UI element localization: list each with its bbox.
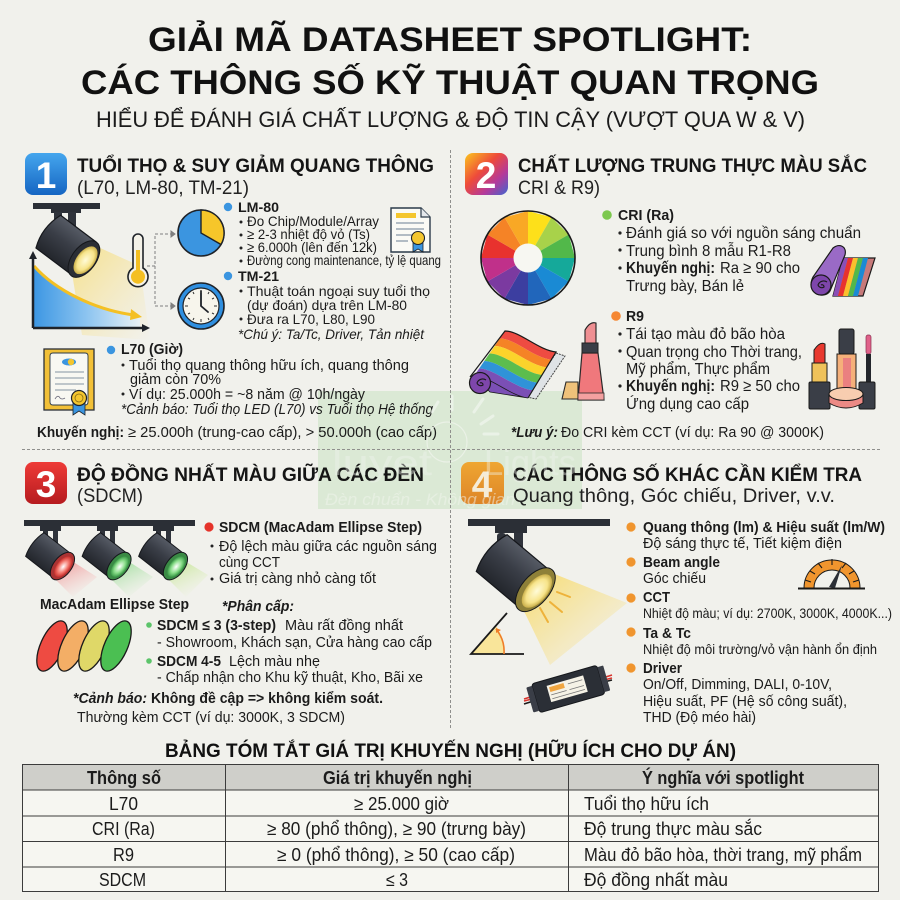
text: LM-80: ≥ 6.000h (lên đến 12k)	[247, 239, 377, 255]
text: CCT	[626, 589, 892, 621]
text: R9: Mỹ phẩm, Thực phẩm	[626, 360, 770, 378]
text: R9: R9	[626, 308, 644, 325]
text: recommendation 1: ≥ 25.000h (trung-cao cấp), > 50.000h (cao cấp)	[128, 424, 437, 441]
badge 3: 3	[36, 464, 56, 505]
heading 2	[518, 155, 867, 199]
text: SDCM warning: Thường kèm CCT (ví dụ: 3000K, 3 SDCM)	[77, 709, 345, 726]
text: LM-80: ≥ 2-3 nhiệt độ vỏ (Ts)	[247, 226, 370, 242]
table row CRI: ≥ 80 (phổ thông), ≥ 90 (trưng bày)	[267, 819, 526, 839]
table row L70	[109, 794, 709, 814]
table row CRI	[92, 818, 762, 839]
table row CRI: CRI (Ra)	[92, 819, 155, 839]
text: CCT: CCT	[643, 589, 670, 606]
table row SDCM: ≤ 3	[386, 870, 408, 890]
text: recommendation 1: Khuyến nghị:	[37, 424, 124, 441]
dashed dividers	[22, 150, 880, 728]
text: SDCM grades: Màu rất đồng nhất	[285, 617, 404, 634]
icon: clock	[178, 283, 224, 329]
text: driver	[626, 660, 847, 726]
icon: color wheel	[481, 211, 575, 305]
text: TM-21: Đưa ra L70, L80, L90	[247, 311, 375, 327]
badge 2	[465, 153, 508, 196]
heading 1	[77, 155, 434, 199]
text: L70: giảm còn 70%	[130, 371, 221, 388]
table title: BẢNG TÓM TẮT GIÁ TRỊ KHUYẾN NGHỊ (HỮU ÍCH CHO DỰ ÁN)	[165, 740, 736, 762]
icon: large spotlight	[468, 519, 627, 665]
icon: gauge	[798, 559, 865, 588]
text: Ta and Tc: Nhiệt độ môi trường/vỏ vận hành ổn định	[643, 641, 877, 657]
title block: HIỂU ĐỂ ĐÁNH GIÁ CHẤT LƯỢNG & ĐỘ TIN CẬY (VƯỢT QUA W & V)	[96, 107, 805, 132]
text: SDCM grades: SDCM 4-5	[157, 653, 221, 670]
text: LM-80	[224, 199, 441, 268]
chart: lumen decay curve	[29, 251, 150, 332]
text: CRI: Trưng bày, Bán lẻ	[626, 278, 744, 295]
table header row: Thông số	[87, 768, 161, 788]
heading 3: (SDCM)	[77, 485, 143, 507]
watermark panel	[318, 391, 582, 509]
text: L70: Tuổi thọ quang thông hữu ích, quang thông	[129, 357, 409, 374]
text: beam angle: Góc chiếu	[643, 570, 706, 587]
text: R9: Quan trọng cho Thời trang,	[626, 344, 802, 361]
text: Ta and Tc	[626, 625, 877, 657]
text: driver: Hiệu suất, PF (Hệ số công suất),	[643, 693, 847, 710]
heading 2: CRI & R9)	[518, 177, 600, 199]
table header row: Ý nghĩa với spotlight	[642, 767, 804, 788]
watermark text: Lights	[484, 442, 576, 483]
text: TM-21: TM-21	[238, 268, 279, 284]
heading 4: CÁC THÔNG SỐ KHÁC CẦN KIỂM TRA	[513, 464, 862, 486]
table row R9: ≥ 0 (phổ thông), ≥ 50 (cao cấp)	[277, 845, 515, 865]
text: SDCM definition	[204, 519, 437, 587]
text: SDCM grades	[146, 598, 432, 686]
heading 3: ĐỘ ĐỒNG NHẤT MÀU GIỮA CÁC ĐÈN	[77, 464, 424, 486]
heading 3	[77, 464, 424, 507]
title block: GIẢI MÃ DATASHEET SPOTLIGHT:	[148, 21, 752, 59]
panel: section 3 SDCM	[23, 462, 437, 726]
text: CRI	[602, 207, 861, 295]
table header row	[87, 767, 804, 788]
heading 1: TUỔI THỌ & SUY GIẢM QUANG THÔNG	[77, 155, 434, 177]
panel: section 2 color rendering	[465, 153, 875, 441]
text: Ta and Tc: Ta & Tc	[643, 625, 691, 642]
text: TM-21: (dự đoán) dựa trên LM-80	[247, 297, 407, 313]
text: SDCM grades: Lệch màu nhẹ	[229, 653, 320, 670]
panel: section 4 other parameters	[461, 462, 892, 726]
text: driver: Driver	[643, 660, 682, 677]
text: beam angle: Beam angle	[643, 554, 720, 571]
text: SDCM warning: Không đề cập => không kiểm soát.	[151, 690, 383, 707]
table row L70: Tuổi thọ hữu ích	[584, 794, 709, 814]
text: R9	[611, 308, 802, 413]
text: note CRI: *Lưu ý:	[511, 424, 558, 441]
title block	[81, 21, 819, 132]
badge 4: 4	[472, 464, 493, 505]
table row SDCM: SDCM	[99, 870, 146, 890]
text: L70: *Cảnh báo: Tuổi thọ LED (L70) vs Tuổi thọ Hệ thống	[121, 401, 434, 418]
badge 1	[25, 153, 67, 196]
heading 2: CHẤT LƯỢNG TRUNG THỰC MÀU SẮC	[518, 155, 867, 177]
text: lumen: Quang thông (lm) & Hiệu suất (lm/W)	[643, 519, 885, 536]
text: TM-21	[224, 268, 430, 342]
text: CRI: CRI (Ra)	[618, 207, 674, 224]
text: TM-21: Thuật toán ngoại suy tuổi thọ	[247, 283, 430, 299]
table row R9	[113, 845, 862, 865]
table grid	[22, 764, 878, 892]
heading 4: Quang thông, Góc chiếu, Driver, v.v.	[513, 485, 835, 507]
icon: lipstick	[562, 323, 604, 400]
text: SDCM definition: Giá trị càng nhỏ càng tốt	[219, 570, 377, 587]
text: beam angle	[626, 554, 720, 587]
badge 3	[25, 462, 67, 505]
text: R9: Tái tạo màu đỏ bão hòa	[626, 326, 785, 343]
arrow: dashed connectors	[147, 231, 175, 309]
text: lumen: Độ sáng thực tế, Tiết kiệm điện	[643, 535, 842, 552]
icon: pie chart	[178, 210, 224, 256]
icon: rainbow fabric	[470, 331, 565, 399]
icon: thermometer	[128, 234, 148, 287]
text: SDCM warning	[73, 690, 383, 726]
text: driver: On/Off, Dimming, DALI, 0-10V,	[643, 676, 832, 693]
watermark text: Đèn chuẩn - Không gian	[325, 490, 515, 509]
text: LM-80: Đo Chip/Module/Array	[247, 213, 379, 229]
badge 4	[461, 462, 504, 505]
text: L70: Ví dụ: 25.000h = ~8 năm @ 10h/ngày	[129, 386, 365, 403]
table header row: Giá trị khuyến nghị	[323, 768, 472, 788]
light beam	[72, 247, 150, 340]
table row SDCM: Độ đồng nhất màu	[584, 870, 728, 890]
watermark text	[325, 396, 576, 509]
table row R9: Màu đỏ bão hòa, thời trang, mỹ phẩm	[584, 845, 862, 865]
icon: document certificate	[391, 208, 430, 252]
text: R9: R9 ≥ 50 cho	[720, 378, 800, 395]
text: driver: THD (Độ méo hài)	[643, 709, 756, 726]
icon: L70 certificate	[44, 349, 94, 415]
heading 4	[513, 464, 862, 507]
summary table	[22, 740, 878, 892]
text: SDCM definition: cùng CCT	[219, 554, 280, 571]
text: R9: Ứng dụng cao cấp	[626, 394, 749, 413]
badge 2: 2	[476, 155, 496, 196]
text: SDCM grades: - Chấp nhận cho Khu kỹ thuật, Kho, Bãi xe	[157, 669, 423, 686]
icon: MacAdam ellipses	[31, 617, 137, 675]
table row L70: ≥ 25.000 giờ	[354, 794, 449, 814]
text: note CRI: Đo CRI kèm CCT (ví dụ: Ra 90 @ 3000K)	[561, 424, 824, 441]
text: CRI: Trung bình 8 mẫu R1-R8	[626, 241, 791, 260]
text: CRI: Ra ≥ 90 cho	[720, 260, 800, 277]
table row L70: L70	[109, 794, 138, 814]
text: LM-80: LM-80	[238, 199, 279, 215]
table row R9: R9	[113, 845, 134, 865]
icon: LED driver	[524, 664, 612, 714]
text: L70	[107, 341, 434, 418]
text: SDCM grades: *Phân cấp:	[222, 598, 294, 615]
heading 1: (L70, LM-80, TM-21)	[77, 177, 249, 199]
text: CRI: Đánh giá so với nguồn sáng chuẩn	[626, 224, 861, 242]
icon: fabric roll	[811, 246, 875, 296]
text: SDCM warning: *Cảnh báo:	[73, 690, 147, 707]
text: R9: Khuyến nghị:	[626, 378, 715, 395]
text: SDCM definition: SDCM (MacAdam Ellipse Step)	[219, 519, 422, 536]
text: lumen	[626, 519, 885, 552]
text: LM-80: Đường cong maintenance, tỷ lệ quang	[247, 252, 441, 268]
panel: section 1 lifetime	[25, 153, 441, 441]
icon: cosmetics	[809, 329, 875, 409]
icon: three track spotlights	[23, 520, 208, 597]
title block: CÁC THÔNG SỐ KỸ THUẬT QUAN TRỌNG	[81, 63, 819, 102]
text: SDCM definition: Độ lệch màu giữa các nguồn sáng	[219, 538, 437, 555]
text: TM-21: *Chú ý: Ta/Tc, Driver, Tản nhiệt	[238, 326, 425, 342]
text: SDCM grades: SDCM ≤ 3 (3-step)	[157, 617, 276, 634]
icon: spotlight	[32, 203, 106, 283]
watermark text: luyet	[332, 442, 432, 483]
text: L70: L70 (Giờ)	[121, 341, 183, 358]
table row CRI: Độ trung thực màu sắc	[584, 818, 762, 839]
icon: beam angle	[471, 613, 524, 654]
table row SDCM	[99, 870, 728, 890]
text: SDCM grades: - Showroom, Khách sạn, Cửa hàng cao cấp	[157, 634, 432, 651]
text: CRI: Khuyến nghị:	[626, 260, 715, 277]
badge 1: 1	[36, 155, 56, 196]
label: MacAdam Ellipse Step: MacAdam Ellipse Step	[40, 596, 189, 613]
